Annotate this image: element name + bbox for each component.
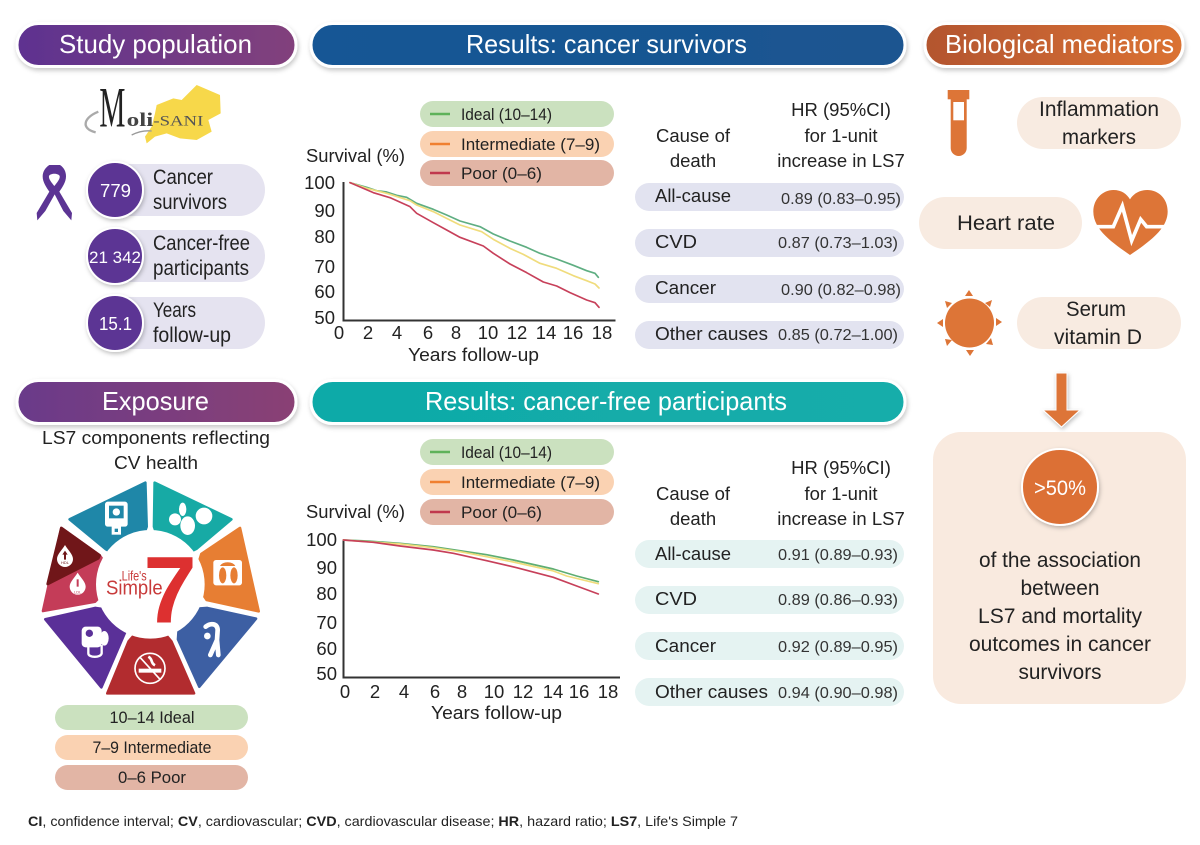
label: heart rate: Heart rate (957, 212, 1055, 235)
chart: survival cancer-free participants: 14 (543, 681, 563, 702)
table: cancer survivors hazard ratios: All-cause (655, 185, 731, 206)
stat: 15.1 years follow-up: follow-up (153, 324, 231, 347)
text: LS7 components: CV health (114, 452, 198, 473)
heading: results cancer-free participants (311, 380, 905, 424)
table: cancer survivors hazard ratios: HR (95%CI) (791, 99, 891, 120)
table: cancer survivors hazard ratios: increase in LS7 (777, 150, 905, 171)
chart: survival cancer survivors: Years follow-up (408, 344, 539, 365)
chart: survival cancer survivors: 6 (423, 322, 433, 343)
table: cancer-free hazard ratios: Cancer (655, 635, 716, 656)
segment: blood pressure (45, 608, 133, 687)
heading: biological mediators: Biological mediators (945, 29, 1174, 59)
heading: study population (17, 24, 296, 66)
table: cancer-free hazard ratios: HR (95%CI) (791, 457, 891, 478)
wheel: Life's Simple 7 (43, 483, 259, 693)
chart: survival cancer-free participants: 70 (316, 612, 337, 633)
stat: 21 342 cancer-free participants: participants (153, 257, 249, 280)
segment: cholesterol: HDL (61, 560, 70, 565)
stat: 15.1 years follow-up (87, 295, 265, 351)
heading: exposure (17, 380, 296, 424)
logo text: Life's Simple 7 (106, 538, 197, 644)
arrow: down to result (1043, 373, 1080, 427)
chart: survival cancer survivors: 80 (314, 226, 335, 247)
chart: survival cancer survivors: 14 (536, 322, 556, 343)
chart: survival cancer-free participants: 10 (484, 681, 504, 702)
stat: 779 cancer survivors: 779 (100, 180, 131, 201)
segment: blood sugar (70, 483, 147, 563)
table: cancer survivors hazard ratios: Cause of (656, 125, 731, 146)
table: cancer survivors hazard ratios: CVD (655, 231, 697, 252)
chart: survival cancer survivors: 4 (392, 322, 402, 343)
logo: Moli-SANI: M (99, 78, 125, 140)
table: cancer survivors hazard ratios: 0.85 (0.72–1.00) (778, 327, 898, 344)
table: cancer survivors hazard ratios: 0.87 (0.73–1.03) (778, 235, 898, 252)
table: cancer survivors hazard ratios (635, 99, 905, 349)
legend: LS7 score categories (55, 705, 248, 790)
chart: survival cancer survivors: 10 (478, 322, 498, 343)
label: inflammation markers: markers (1062, 126, 1136, 149)
text: association description: outcomes in cancer (969, 633, 1151, 656)
logo text: Life's Simple 7: Life's (122, 568, 147, 584)
panel: more than 50 percent mediated (933, 432, 1186, 704)
legend: cancer survivors chart: Poor (0–6) (461, 164, 542, 183)
table: cancer-free hazard ratios: 0.92 (0.89–0.95) (778, 639, 898, 656)
chart: survival cancer survivors: 70 (314, 256, 335, 277)
chart: survival cancer survivors: 18 (592, 322, 612, 343)
label: heart rate (919, 197, 1082, 249)
legend: LS7 score categories: 7–9 Intermediate (92, 738, 212, 757)
table: cancer-free hazard ratios: for 1-unit (804, 483, 878, 504)
stat: 21 342 cancer-free participants: Cancer-free (153, 232, 250, 255)
table: cancer-free hazard ratios: 0.94 (0.90–0.98) (778, 685, 898, 702)
heading: results cancer-free participants: Results: cancer-free participants (425, 386, 787, 416)
chart: survival cancer survivors: 90 (314, 200, 335, 221)
logo: Moli-SANI: -SANI (153, 113, 203, 129)
table: cancer survivors hazard ratios: 0.90 (0.82–0.98) (781, 282, 901, 299)
stat: 15.1 years follow-up: Years (153, 299, 196, 322)
icon: test tube (948, 90, 969, 156)
text: association description: LS7 and mortality (978, 605, 1142, 628)
text: association description: between (1020, 577, 1100, 600)
badge: >50%: >50% (1034, 477, 1086, 500)
stat: 15.1 years follow-up: 15.1 (99, 313, 132, 334)
badge: >50% (1022, 449, 1098, 525)
legend: cancer-free chart: Intermediate (7–9) (461, 473, 600, 492)
chart: survival cancer-free participants: 50 (316, 663, 337, 684)
chart: survival cancer-free participants: 8 (457, 681, 467, 702)
chart: survival cancer survivors: 0 (334, 322, 344, 343)
label: serum vitamin D: vitamin D (1054, 326, 1142, 349)
logo: Moli-SANI: oli (127, 110, 154, 131)
segment: cholesterol: LDL (74, 589, 82, 594)
stat: 779 cancer survivors (87, 162, 265, 218)
legend: cancer-free chart: Poor (0–6) (461, 503, 542, 522)
chart: survival cancer-free participants (306, 501, 620, 723)
table: cancer survivors hazard ratios: Other causes (655, 323, 768, 344)
stat: 21 342 cancer-free participants: 21 342 (89, 248, 141, 267)
icon: heart with pulse (1093, 190, 1168, 255)
legend: cancer survivors chart (420, 101, 614, 186)
heading: exposure: Exposure (102, 386, 209, 416)
table: cancer-free hazard ratios: death (670, 508, 716, 529)
heading: results cancer survivors: Results: cancer survivors (466, 29, 747, 59)
segment: no smoking (107, 617, 194, 693)
label: serum vitamin D: Serum (1066, 298, 1126, 321)
legend: LS7 score categories: 0–6 Poor (118, 768, 186, 787)
chart: survival cancer-free participants: 100 (306, 529, 337, 550)
segment: cholesterol (43, 528, 117, 611)
text: LS7 components: LS7 components reflecting (42, 427, 270, 448)
table: cancer-free hazard ratios: Cause of (656, 483, 731, 504)
text: association description: of the association (979, 549, 1141, 572)
legend: cancer-free chart (420, 439, 614, 525)
chart: survival cancer survivors: 8 (451, 322, 461, 343)
chart: survival cancer-free participants: 60 (316, 638, 337, 659)
segment: healthy weight (193, 528, 259, 611)
chart: survival cancer-free participants: 18 (598, 681, 618, 702)
stat: 779 cancer survivors: Cancer (153, 166, 213, 189)
chart: survival cancer-free participants: 0 (340, 681, 350, 702)
stat: 779 cancer survivors: survivors (153, 191, 227, 214)
chart: survival cancer-free participants: 80 (316, 583, 337, 604)
text: association description: survivors (1018, 661, 1102, 684)
chart: survival cancer-free participants: 6 (430, 681, 440, 702)
heading: biological mediators (925, 24, 1183, 66)
table: cancer-free hazard ratios: 0.91 (0.89–0.93) (778, 547, 898, 564)
footnote: abbreviations: CI, confidence interval; CV, cardiovascular; CVD, cardiovascular disease; HR, hazard ratio; LS7, Life's Simple 7 (28, 813, 738, 829)
heading: results cancer survivors (311, 24, 905, 66)
table: cancer-free hazard ratios: increase in LS7 (777, 508, 905, 529)
chart: survival cancer survivors: 12 (507, 322, 527, 343)
legend: cancer survivors chart: Ideal (10–14) (461, 105, 552, 124)
chart: survival cancer-free participants: 90 (316, 557, 337, 578)
segment: physical activity (178, 608, 256, 687)
table: cancer survivors hazard ratios: 0.89 (0.83–0.95) (781, 191, 901, 208)
text: association description (969, 549, 1151, 684)
legend: cancer survivors chart: Intermediate (7–9) (461, 135, 600, 154)
chart: survival cancer survivors: 50 (314, 307, 335, 328)
chart: survival cancer survivors: 2 (363, 322, 373, 343)
label: inflammation markers (1017, 97, 1181, 149)
logo text: Life's Simple 7: Simple (106, 576, 163, 599)
chart: survival cancer survivors: 100 (304, 172, 335, 193)
table: cancer survivors hazard ratios: for 1-unit (804, 125, 878, 146)
table: cancer-free hazard ratios: CVD (655, 588, 697, 609)
segment: healthy diet (154, 483, 231, 563)
table: cancer-free hazard ratios: All-cause (655, 543, 731, 564)
chart: survival cancer-free participants: 4 (399, 681, 409, 702)
chart: survival cancer survivors: Survival (%) (306, 145, 405, 166)
icon: sun (937, 290, 1002, 356)
label: inflammation markers: Inflammation (1039, 98, 1159, 121)
logo text: Life's Simple 7: 7 (143, 538, 197, 644)
chart: survival cancer-free participants: Survival (%) (306, 501, 405, 522)
chart: survival cancer-free participants: 12 (513, 681, 533, 702)
label: serum vitamin D (1017, 297, 1181, 349)
table: cancer survivors hazard ratios: death (670, 150, 716, 171)
legend: LS7 score categories: 10–14 Ideal (110, 708, 194, 727)
chart: survival cancer survivors: 60 (314, 281, 335, 302)
chart: survival cancer-free participants: Years follow-up (431, 702, 562, 723)
chart: survival cancer-free participants: 16 (569, 681, 589, 702)
icon: purple ribbon (37, 165, 72, 220)
heading: study population: Study population (59, 29, 252, 59)
text: LS7 components (42, 427, 270, 473)
table: cancer-free hazard ratios: 0.89 (0.86–0.93) (778, 592, 898, 609)
chart: survival cancer survivors (304, 145, 616, 365)
table: cancer-free hazard ratios: Other causes (655, 681, 768, 702)
logo: Moli-SANI (86, 78, 221, 143)
table: cancer-free hazard ratios (635, 457, 905, 706)
chart: survival cancer-free participants: 2 (370, 681, 380, 702)
table: cancer survivors hazard ratios: Cancer (655, 277, 716, 298)
legend: cancer-free chart: Ideal (10–14) (461, 443, 552, 462)
stat: 21 342 cancer-free participants (87, 228, 265, 284)
chart: survival cancer survivors: 16 (563, 322, 583, 343)
